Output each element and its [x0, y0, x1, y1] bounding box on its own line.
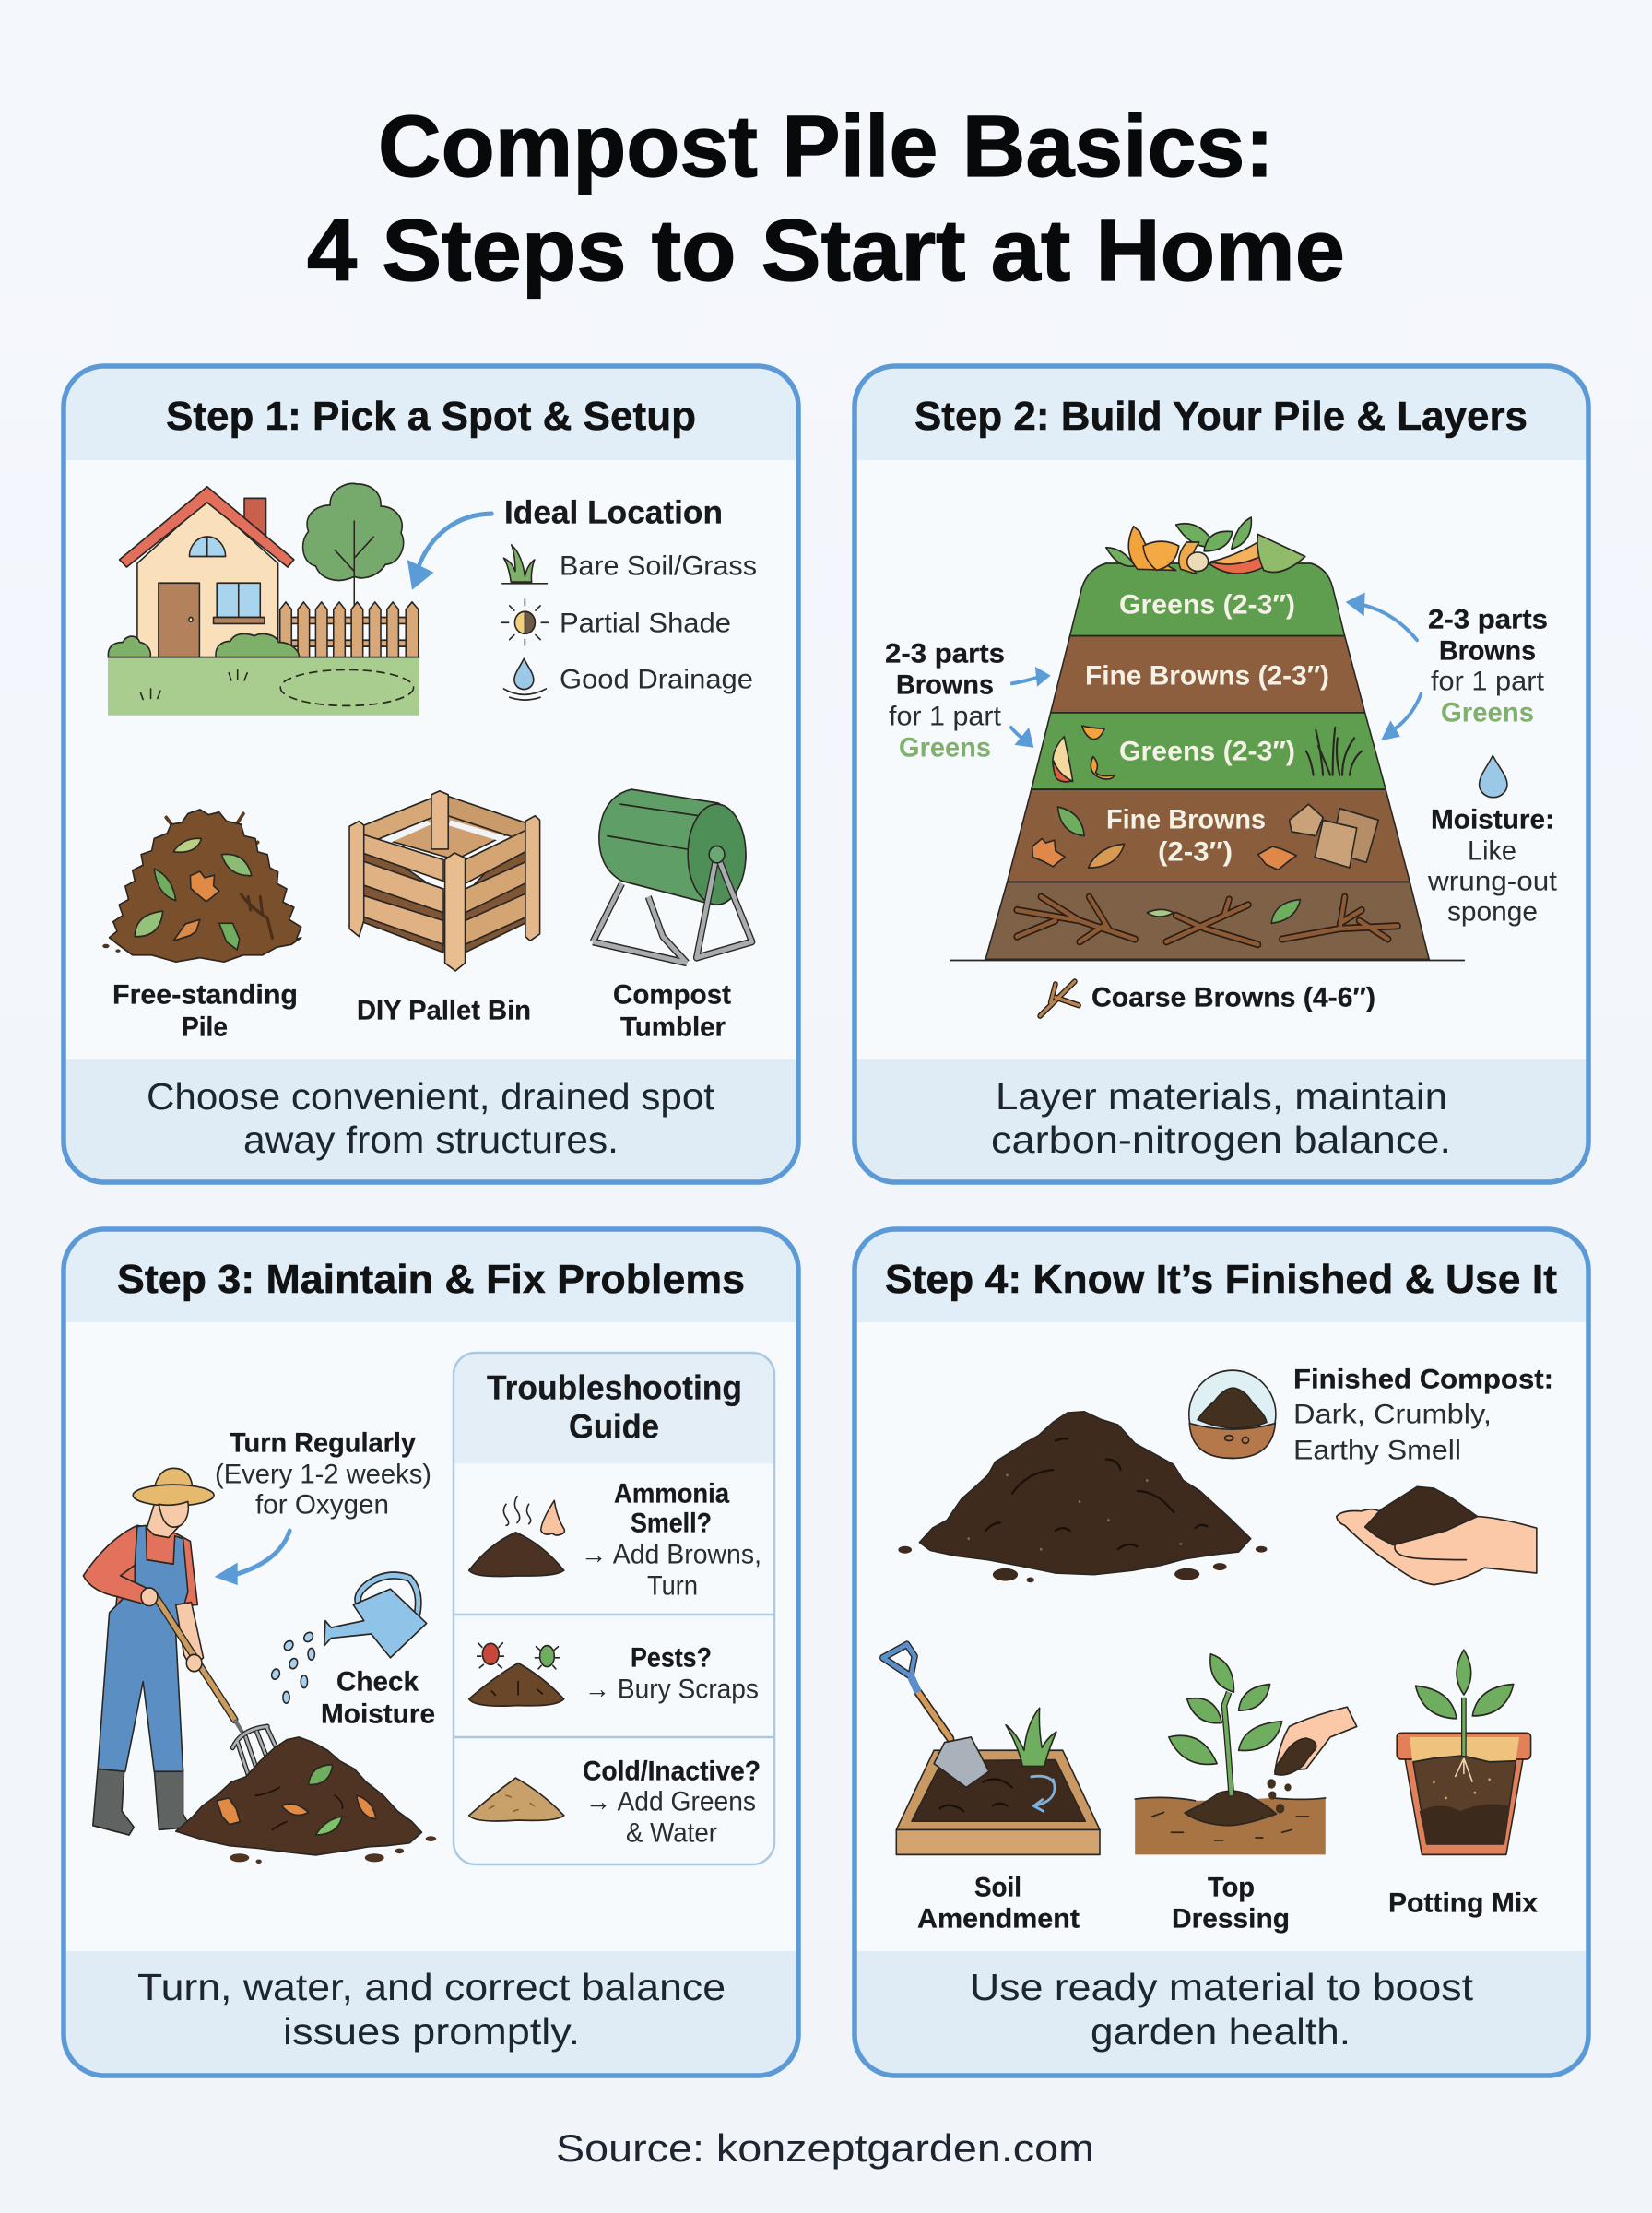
- label: top dressing: Top: [1208, 1872, 1255, 1903]
- text: check moisture: Check: [336, 1667, 419, 1697]
- label: top dressing: Dressing: [1172, 1903, 1290, 1935]
- text: compost tumbler: [613, 979, 731, 1042]
- text: finished compost: [1293, 1365, 1553, 1466]
- text: layer labels: (2-3″): [1158, 837, 1233, 867]
- text: turn regularly: (Every 1-2 weeks): [215, 1459, 431, 1490]
- row: pests: → Bury Scraps: [584, 1675, 759, 1704]
- caption: step 2: Layer materials, maintain: [996, 1075, 1447, 1118]
- chart: layered pile diagram: [950, 517, 1464, 960]
- callout: left ratio: [885, 638, 1005, 763]
- caption: step 3: [137, 1966, 726, 2053]
- caption: step 4: garden health.: [1091, 2010, 1351, 2053]
- row: cold inactive: Cold/Inactive?: [583, 1756, 761, 1787]
- panel: step 3: [62, 1228, 800, 2077]
- panel: troubleshooting guide: [454, 1353, 774, 1864]
- callout: right ratio: [1428, 605, 1548, 728]
- heading: step 1: Step 1: Pick a Spot & Setup: [166, 394, 696, 439]
- callout: right ratio: for 1 part: [1431, 666, 1545, 697]
- text: free-standing pile: Pile: [182, 1012, 228, 1042]
- title: 4 Steps to Start at Home: [307, 202, 1345, 300]
- row: cold inactive: [469, 1756, 761, 1848]
- text: partial shade: Partial Shade: [560, 609, 731, 638]
- label: potting mix: Potting Mix: [1388, 1888, 1538, 1918]
- caption: step 1: away from structures.: [243, 1118, 619, 1161]
- row: ammonia smell: Smell?: [631, 1509, 712, 1538]
- label: soil amendment: Amendment: [917, 1903, 1080, 1935]
- caption: step 4: Use ready material to boost: [970, 1966, 1474, 2008]
- caption: step 2: carbon-nitrogen balance.: [991, 1118, 1451, 1161]
- illustration: farmer turning compost: [83, 1468, 283, 1835]
- row: cold inactive: & Water: [626, 1818, 717, 1848]
- icon: hand holding compost: [1337, 1486, 1537, 1585]
- icons: fine browns leaves and cardboard: [1032, 804, 1378, 870]
- text: layer labels: Fine Browns: [1106, 804, 1266, 835]
- text: free-standing pile: [112, 979, 298, 1042]
- callout: right ratio: 2-3 parts: [1428, 605, 1548, 634]
- callout: right ratio: Browns: [1439, 636, 1536, 666]
- text: good drainage: Good Drainage: [560, 664, 753, 695]
- heading: troubleshooting: Guide: [569, 1407, 659, 1446]
- callout: left ratio: Greens: [899, 732, 991, 763]
- text: layer labels: [1085, 590, 1329, 867]
- caption: step 1: [147, 1075, 715, 1161]
- callout: left ratio: Browns: [896, 669, 994, 701]
- text: DIY pallet bin: DIY Pallet Bin: [357, 996, 531, 1025]
- row: cold inactive: → Add Greens: [585, 1787, 756, 1817]
- callout: left ratio: for 1 part: [889, 701, 1002, 732]
- text: turn regularly: for Oxygen: [255, 1490, 389, 1520]
- text: turn regularly: Turn Regularly: [230, 1427, 416, 1459]
- callout: moisture: sponge: [1447, 896, 1538, 928]
- text: finished compost: Finished Compost:: [1293, 1365, 1553, 1394]
- icon: water drop: [1480, 755, 1507, 798]
- title: Compost Pile Basics:: [378, 98, 1274, 195]
- heading: troubleshooting: [487, 1368, 742, 1446]
- heading: step 2: Step 2: Build Your Pile & Layers: [914, 394, 1528, 439]
- caption: step 2: [991, 1075, 1451, 1161]
- pile: turned compost: [176, 1737, 436, 1864]
- text: finished compost: Dark, Crumbly,: [1293, 1400, 1492, 1429]
- heading: step 4: Step 4: Know It’s Finished & Use It: [885, 1257, 1557, 1302]
- callout: moisture: Moisture:: [1431, 804, 1554, 835]
- row: ammonia smell: Turn: [647, 1571, 698, 1601]
- text: ideal location heading: Ideal Location: [504, 494, 723, 531]
- heading: troubleshooting: Troubleshooting: [487, 1368, 742, 1407]
- text: check moisture: [321, 1667, 435, 1730]
- row: ammonia smell: [469, 1479, 761, 1601]
- text: check moisture: Moisture: [321, 1698, 435, 1730]
- label: soil amendment: [917, 1872, 1080, 1935]
- label: top dressing: [1172, 1872, 1290, 1935]
- caption: step 1: Choose convenient, drained spot: [147, 1075, 715, 1118]
- icon: top dressing: [1135, 1654, 1357, 1854]
- panel: step 2: [852, 365, 1590, 1182]
- callout: moisture: wrung-out: [1427, 867, 1558, 896]
- text: turn regularly: [215, 1427, 431, 1520]
- panel: step 1: [62, 365, 800, 1182]
- title: [307, 98, 1345, 300]
- icon: potting mix: [1397, 1650, 1531, 1854]
- icons: top scraps: [1106, 517, 1305, 574]
- arrows: right ratio: [1346, 593, 1421, 740]
- callout: right ratio: Greens: [1441, 697, 1534, 728]
- icon: compost close-up circle: [1189, 1370, 1276, 1458]
- heading: step 3: Step 3: Maintain & Fix Problems: [117, 1257, 745, 1302]
- label: coarse browns: Coarse Browns (4-6″): [1092, 983, 1375, 1012]
- icon: partial shade sun: [502, 599, 549, 645]
- arrow: turn regularly: [215, 1531, 289, 1585]
- icon: grass: [502, 545, 547, 584]
- icon: watering can: [270, 1575, 427, 1703]
- text: compost tumbler: Tumbler: [620, 1012, 726, 1042]
- text: free-standing pile: Free-standing: [112, 979, 298, 1011]
- label: soil amendment: Soil: [974, 1872, 1021, 1903]
- callout: moisture: [1427, 804, 1558, 928]
- caption: step 4: [970, 1966, 1474, 2053]
- icon: compost tumbler: [593, 789, 752, 963]
- panel: step 4: [852, 1228, 1590, 2077]
- text: bare soil: Bare Soil/Grass: [560, 551, 757, 581]
- icon: drainage drop: [503, 658, 546, 700]
- icons: coarse browns branches: [1017, 897, 1398, 944]
- text: layer labels: Greens (2-3″): [1119, 736, 1295, 767]
- caption: step 3: Turn, water, and correct balance: [137, 1966, 726, 2008]
- callout: moisture: Like: [1468, 835, 1516, 867]
- arrows: left ratio: [1011, 667, 1051, 748]
- row: ammonia smell: → Add Browns,: [581, 1540, 761, 1569]
- callout: left ratio: 2-3 parts: [885, 638, 1005, 669]
- row: pests: [469, 1643, 759, 1706]
- icon: free-standing pile: [102, 810, 301, 962]
- text: layer labels: Greens (2-3″): [1119, 590, 1295, 620]
- illustration: house, tree, fence and yard: [108, 483, 419, 716]
- icon: DIY pallet bin: [349, 791, 540, 971]
- illustration: finished compost pile: [898, 1412, 1267, 1582]
- caption: step 3: issues promptly.: [283, 2010, 580, 2053]
- text: layer labels: Fine Browns (2-3″): [1085, 660, 1329, 692]
- row: ammonia smell: Ammonia: [614, 1479, 729, 1509]
- icon: soil amendment: [883, 1644, 1100, 1854]
- text: compost tumbler: Compost: [613, 979, 731, 1011]
- source line: Source: konzeptgarden.com: [556, 2126, 1094, 2170]
- text: finished compost: Earthy Smell: [1293, 1435, 1461, 1466]
- arrow: to ideal location: [407, 514, 491, 590]
- row: pests: Pests?: [631, 1643, 712, 1673]
- icon: coarse branch: [1040, 981, 1079, 1016]
- icons: greens layer scraps: [1053, 726, 1362, 782]
